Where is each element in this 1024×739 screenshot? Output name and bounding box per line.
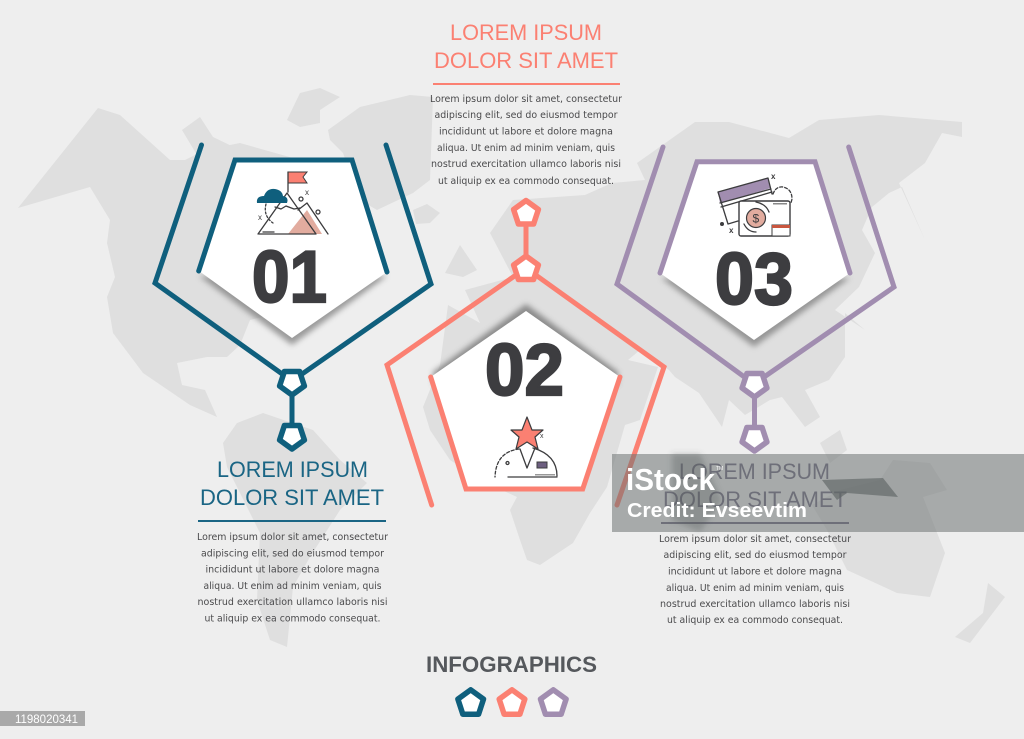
body 1: ut aliquip ex ea commodo consequat. <box>204 614 380 624</box>
node 1a <box>280 372 304 395</box>
panel 3 outer frame <box>617 147 894 384</box>
body 3: aliqua. Ut enim ad minim veniam, quis <box>666 583 844 594</box>
body 1 <box>197 532 389 624</box>
image id tag <box>0 711 85 726</box>
icon: cards with dollar: $ <box>752 212 760 226</box>
watermark: Credit: Evseevtim <box>627 500 807 522</box>
panel 3 <box>617 147 894 626</box>
image id tag: 1198020341 <box>15 714 78 726</box>
number 01: 01 <box>252 237 327 318</box>
body 2: adipiscing elit, sed do eiusmod tempor <box>434 110 618 121</box>
body 2: aliqua. Ut enim ad minim veniam, quis <box>437 143 615 154</box>
legend coral <box>499 690 525 714</box>
watermark: TM <box>716 466 723 472</box>
icon: person with star <box>495 417 557 477</box>
body 1: adipiscing elit, sed do eiusmod tempor <box>201 548 385 559</box>
legend teal <box>458 690 484 714</box>
rule 1 <box>198 520 386 522</box>
panel 1 <box>155 145 431 624</box>
panel 2 card frame <box>431 377 620 489</box>
heading 3: LOREM IPSUM <box>679 459 830 484</box>
body 2 <box>430 94 623 187</box>
node 1b <box>280 426 304 449</box>
panel 1 outer frame <box>155 145 431 381</box>
heading 1: LOREM IPSUM <box>217 457 368 482</box>
icon: cards with dollar: x <box>729 226 734 235</box>
panel 2 card shadow <box>433 304 618 385</box>
body 3 <box>659 534 852 626</box>
body 3: incididunt ut labore et dolore magna <box>668 566 842 578</box>
body 1: aliqua. Ut enim ad minim veniam, quis <box>204 581 382 592</box>
icon: cards with dollar: x <box>771 172 776 181</box>
panel 1 card frame <box>199 160 387 272</box>
node 2a <box>514 200 538 224</box>
body 3: nostrud exercitation ullamco laboris nisi <box>660 599 850 610</box>
heading 2: LOREM IPSUM <box>450 20 602 45</box>
heading 3 <box>663 459 847 512</box>
body 1: Lorem ipsum dolor sit amet, consectetur <box>197 532 389 543</box>
icon: cards with dollar <box>718 172 792 236</box>
panel 2 white card <box>431 311 620 489</box>
connector 2 <box>524 216 528 264</box>
footer title: INFOGRAPHICS <box>426 652 597 677</box>
heading 2 <box>434 20 618 73</box>
icon: person with star: x <box>540 433 544 440</box>
panel 1 card shadow <box>199 276 387 345</box>
panel 3 card shadow <box>661 278 850 347</box>
legend <box>458 690 566 714</box>
body 3: ut aliquip ex ea commodo consequat. <box>667 615 843 626</box>
node 3b <box>742 428 767 451</box>
body 2: nostrud exercitation ullamco laboris nisi <box>431 159 621 170</box>
panel 2 outer frame <box>387 268 664 505</box>
panel 1 white card <box>199 160 387 338</box>
body 1: nostrud exercitation ullamco laboris nisi <box>198 597 388 608</box>
connector 3 <box>752 388 757 436</box>
heading 1 <box>200 457 384 510</box>
heading 1: DOLOR SIT AMET <box>200 485 384 510</box>
rule 3 <box>661 522 849 524</box>
icon: mountain with flag: x <box>258 213 262 222</box>
body 3: adipiscing elit, sed do eiusmod tempor <box>664 550 847 561</box>
panel 3 card frame <box>660 162 850 273</box>
number 02: 02 <box>485 330 564 411</box>
watermark: iStock <box>626 462 716 497</box>
body 2: Lorem ipsum dolor sit amet, consectetur <box>430 94 623 105</box>
panel 3 white card <box>660 162 850 340</box>
body 3: Lorem ipsum dolor sit amet, consectetur <box>659 534 852 545</box>
number 03: 03 <box>715 239 793 320</box>
node 3a <box>742 374 767 397</box>
body 1: incididunt ut labore et dolore magna <box>206 565 380 576</box>
icon: mountain with flag: x <box>305 188 309 197</box>
connector 1 <box>290 385 294 435</box>
icon: mountain with flag <box>257 172 328 234</box>
heading 3: DOLOR SIT AMET <box>663 487 847 512</box>
world map <box>18 88 1005 647</box>
body 2: incididunt ut labore et dolore magna <box>439 126 613 138</box>
watermark <box>612 454 1024 532</box>
node 2b <box>514 256 538 280</box>
panel 2 <box>387 20 664 505</box>
heading 2: DOLOR SIT AMET <box>434 48 618 73</box>
legend purple <box>540 690 566 714</box>
rule 2 <box>433 83 620 85</box>
body 2: ut aliquip ex ea commodo consequat. <box>438 176 614 187</box>
